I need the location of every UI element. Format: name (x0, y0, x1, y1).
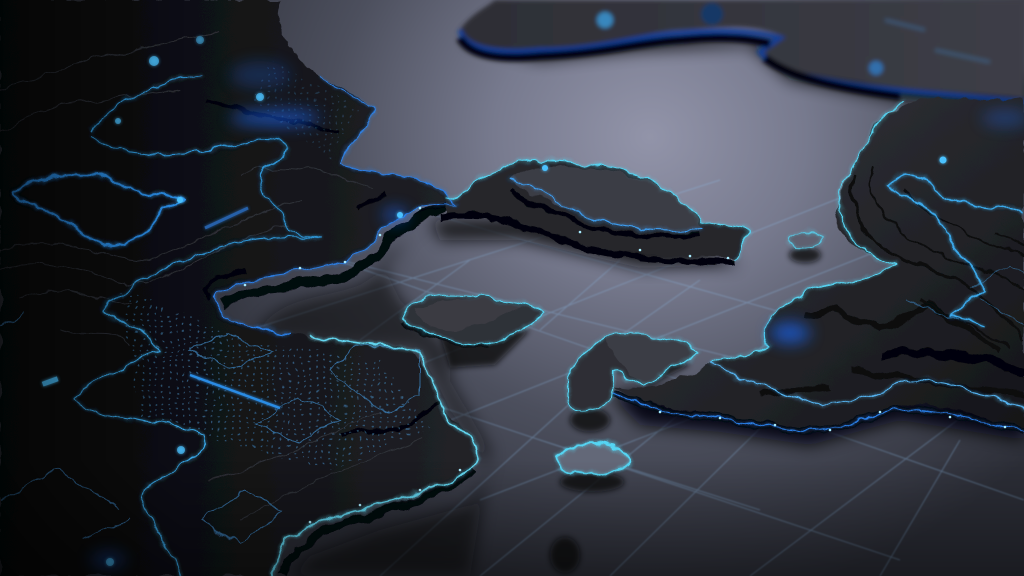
island: tiny right (788, 232, 825, 249)
base layer: top landmass (460, 38, 900, 96)
shadow: top landmass (465, 30, 1024, 110)
landmass: top (460, 0, 1024, 102)
outline: inland contours (92, 75, 318, 310)
dot matrix (120, 290, 430, 470)
light panels: right (905, 265, 1024, 325)
outline: centre island (447, 160, 752, 258)
outline: right contours (890, 174, 1024, 325)
coastline sparkle points (244, 207, 1006, 523)
landmass: right (612, 97, 1024, 432)
contour lines (0, 30, 420, 520)
outline: left lake (15, 175, 185, 245)
island: small upper centre (402, 295, 545, 346)
shadow: right landmass (610, 390, 1024, 445)
grid lines on surface (250, 180, 1024, 576)
outline: top shoreline (320, 75, 375, 165)
shadow: left landmass (255, 225, 490, 576)
shadow: centre island (430, 215, 740, 268)
edge glow: top landmass (460, 30, 1024, 102)
terrain layers (760, 165, 1024, 395)
island: small oval (556, 444, 632, 475)
circuit boxes (0, 312, 420, 545)
terrain layers (222, 205, 456, 305)
terrain band: lower right (880, 349, 1024, 378)
outline: right coast (712, 100, 905, 365)
island: centre (440, 160, 752, 262)
outline: small islands (402, 295, 545, 343)
shadow: small islands (440, 247, 821, 573)
dot matrix: upper (250, 60, 360, 160)
island: lower centre (567, 334, 697, 413)
outline: left coast (212, 165, 456, 334)
landmass: left (0, 0, 476, 576)
